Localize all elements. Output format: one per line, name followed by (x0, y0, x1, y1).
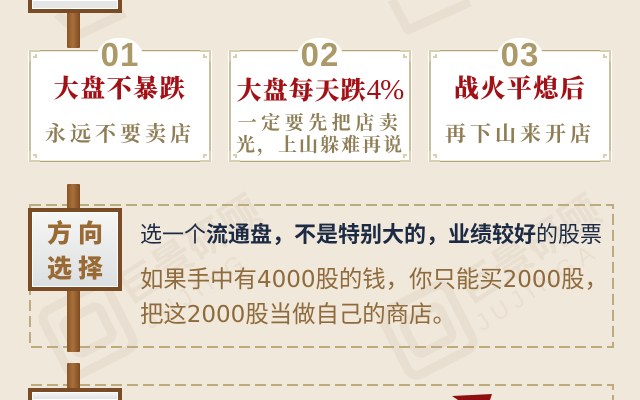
watermark graphics: JUJINGA (471, 237, 604, 337)
card 03: 再下山来开店 (445, 122, 595, 146)
card 01: 永远不要卖店 (45, 122, 195, 146)
card 02: 一定要先把店卖 (238, 113, 402, 134)
card 03 (428, 36, 612, 163)
card 01: 大盘不暴跌 (54, 76, 186, 103)
heading: pick a stock: 选一个流通盘，不是特别大的，业绩较好的股票 (140, 222, 602, 247)
top signpost (28, 0, 122, 48)
card 01 (28, 36, 212, 163)
red mark (452, 394, 492, 400)
card 03: 03 (501, 36, 539, 73)
panel: direction selection (29, 204, 614, 348)
watermark graphics: 巨景研顾 (451, 189, 609, 313)
card 02: 大盘每天跌4% (237, 74, 403, 106)
card 01: 01 (101, 36, 139, 73)
watermark graphics: 巨景研顾 (111, 189, 269, 313)
text block: buying advice (140, 266, 608, 328)
text block: buying advice: 如果手中有4000股的钱，你只能买2000股， (140, 266, 608, 293)
panel: next section (31, 384, 614, 400)
card 03: 战火平熄后 (454, 76, 586, 103)
card 02: 02 (301, 36, 339, 73)
card 02: 光，上山躲难再说 (236, 135, 404, 156)
signpost: next section (28, 363, 122, 400)
signpost: direction selection (28, 184, 122, 352)
text block: buying advice: 把这2000股当做自己的商店。 (140, 300, 456, 328)
watermark graphics: JUJING (139, 247, 254, 335)
signpost: direction selection: 选择 (47, 255, 109, 283)
card 02 (228, 36, 412, 163)
signpost: direction selection: 方向 (47, 220, 109, 248)
